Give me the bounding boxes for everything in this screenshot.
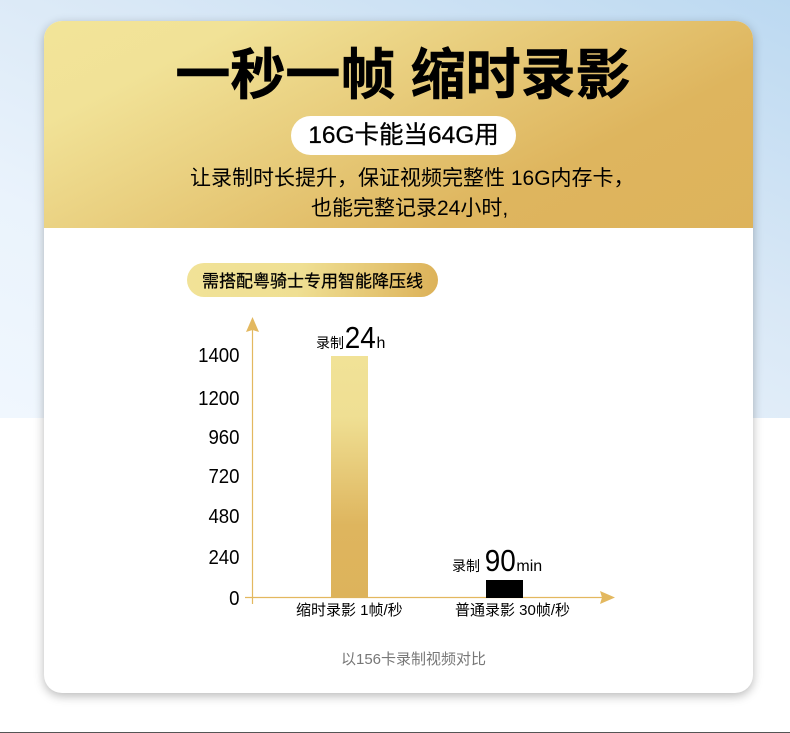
title: 一秒一帧 缩时录影 [175,44,631,106]
y-axis tick: 720: 720 [208,466,239,488]
text: description line 2: 也能完整记录24小时, [311,196,508,220]
pill: capacity claim: 16G卡能当64G用 [308,122,499,149]
y-axis tick: 1200: 1200 [198,388,239,410]
bar label: 90min: 90 [485,543,516,578]
y-axis tick: 1400: 1400 [198,345,239,367]
x-axis label: time-lapse: 缩时录影 1帧/秒 [296,602,403,619]
bottom rule [0,732,790,733]
bar label: 24h: 24 [345,320,376,355]
y-axis tick: 480: 480 [208,506,239,528]
text: description line 1: 让录制时长提升，保证视频完整性 16G内存卡， [190,166,635,190]
pill: cable requirement [187,263,438,297]
bar: time-lapse recording [331,356,368,598]
footnote: 以156卡录制视频对比 [341,651,486,668]
bar label: 90min: 录制 min [452,558,542,575]
bar label: 24h [316,320,385,355]
y-axis tick: 0: 0 [229,588,239,610]
y-axis tick: 240: 240 [208,547,239,569]
x-axis label: normal: 普通录影 30帧/秒 [455,602,570,619]
background: blue gradient band [0,0,790,418]
bar label: 24h: 录制 h [316,335,385,352]
bar: normal recording [486,580,523,598]
chart: axes [245,317,615,604]
y-axis tick: 960: 960 [208,427,239,449]
bar label: 90min [452,543,542,578]
panel: gold header [44,21,753,228]
pill: capacity claim [291,116,516,155]
pill text: 需搭配粤骑士专用智能降压线 [202,272,423,290]
